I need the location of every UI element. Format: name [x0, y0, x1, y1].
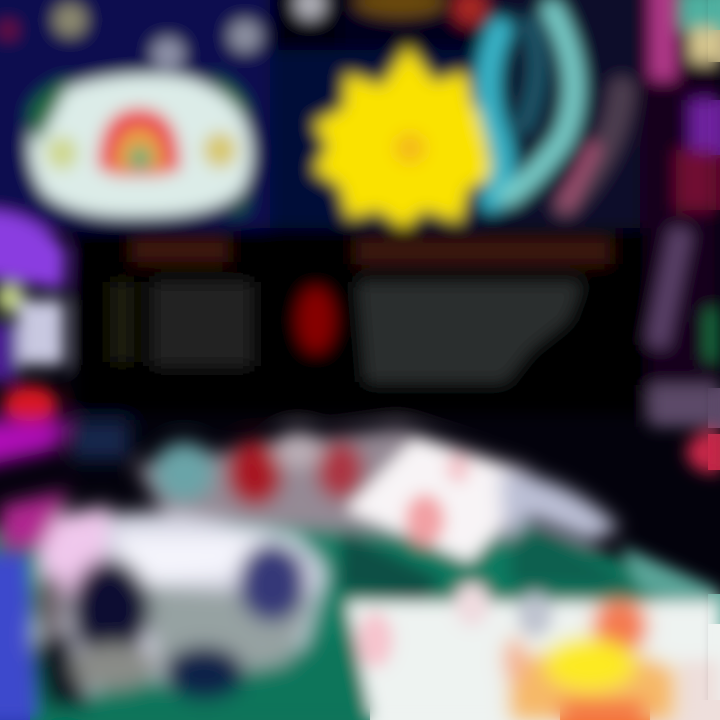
poker chips and cards pile [0, 490, 328, 705]
emblem: white badge with rainbow [28, 74, 252, 216]
playing card: top centre [346, 438, 524, 562]
left blue edge [0, 555, 36, 720]
text block: right column [358, 282, 582, 382]
right edge neon strips [646, 0, 720, 474]
decorative stars [0, 0, 487, 70]
back grey card band [135, 428, 530, 540]
magenta floor glow [0, 420, 130, 470]
playing card: right fragment [500, 470, 620, 542]
left purple character [0, 211, 66, 425]
green felt shadows [338, 529, 640, 600]
playing cards: bottom right [347, 583, 720, 720]
heading: right column [356, 238, 610, 264]
yellow and orange casino token [504, 598, 675, 720]
card row and red chips at the back [154, 432, 362, 504]
swirling ribbons [488, 10, 622, 205]
background: top field [0, 0, 720, 420]
background: green table and dark floor [0, 510, 720, 720]
panel: black text board [76, 228, 648, 414]
icon: yellow sunburst [314, 46, 500, 228]
heading: left column [132, 238, 228, 262]
text block: left column [110, 282, 252, 366]
icon: red versus mark [298, 288, 334, 352]
